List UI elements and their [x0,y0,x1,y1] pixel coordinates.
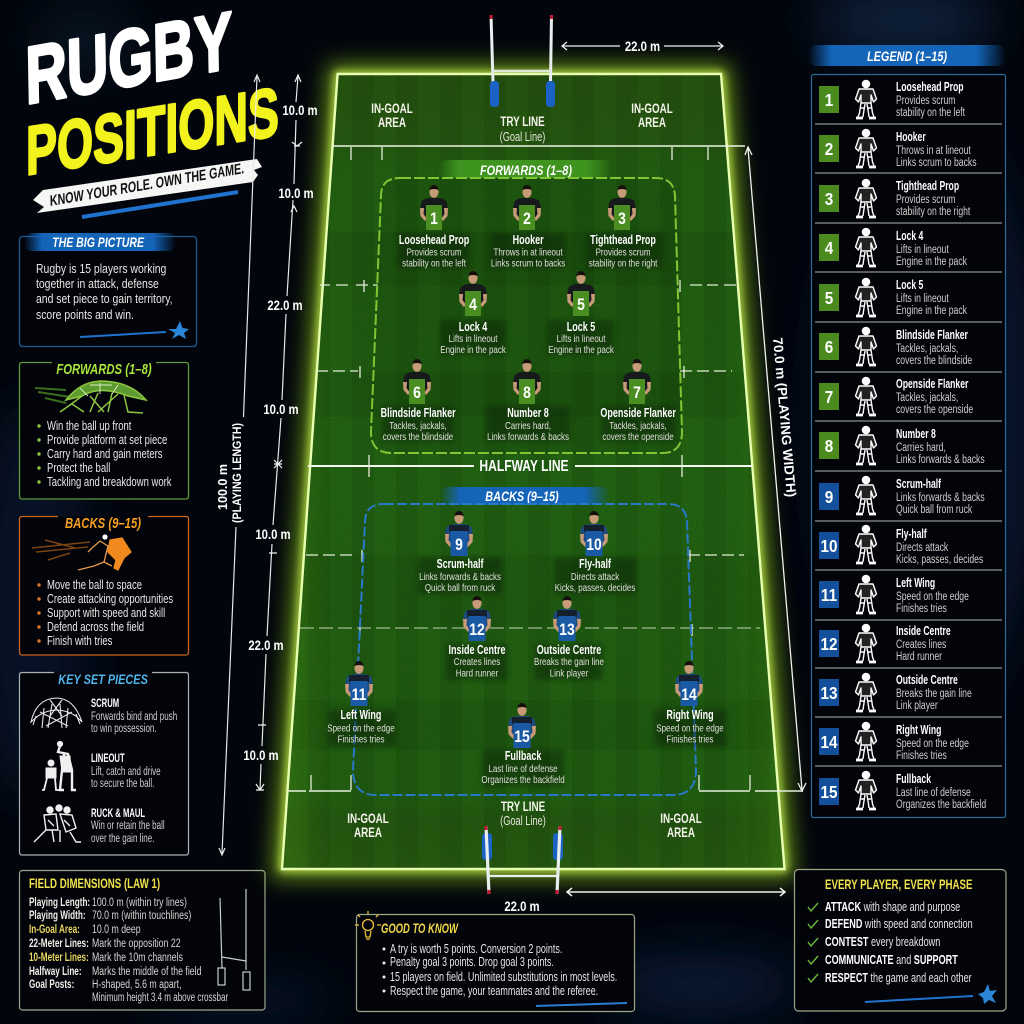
zone label: top left in-goal: AREA [378,114,406,130]
field: grass [270,70,800,875]
legend row 5: 5 [825,288,833,308]
legend row 1 [819,80,965,119]
player 13 [534,596,604,680]
player 15: 15 [514,728,530,746]
bullet list: Protect the ball [47,462,110,475]
lines: dashed field markings [300,147,760,790]
player 15 [481,703,565,786]
player 7: Openside Flanker [600,407,676,420]
dimension: playing length outer arrow: (PLAYING LENGTH) [230,423,244,523]
banner: the big picture [24,233,176,251]
player 13: Link player [550,667,588,679]
player 2: Hooker [513,234,544,247]
bullet list: Create attacking opportunities [47,593,174,606]
legend row 13 [819,673,972,712]
legend row 2: 2 [825,139,833,159]
legend row 10: Kicks, passes, decides [896,554,983,566]
bullet list: Provide platform at set piece [47,434,167,447]
ruck text: over the gain line. [91,833,154,846]
player 9: Quick ball from ruck [425,582,496,593]
player 1: Provides scrum [407,246,462,258]
scrum text: to win possession. [91,723,157,736]
dimension: inner side segments: 10.0 m [243,748,279,763]
legend row 7 [819,377,973,416]
heading: THE BIG PICTURE [52,235,145,250]
legend row 14: 14 [821,732,838,752]
player 12 [446,596,508,680]
player 3: stability on the right [589,257,658,269]
checklist: DEFEND with speed and connection [825,918,973,931]
dimension: top width arrow [562,39,723,54]
icon: light bulb [355,911,381,939]
legend row 3: Provides scrum [896,194,955,206]
legend row 9: Links forwards & backs [896,492,985,504]
panel: key set pieces [20,672,188,855]
tagline banner [33,159,262,217]
legend row 13: Outside Centre [896,673,958,688]
legend row 4: Lifts in lineout [896,244,949,256]
legend row 10: 10 [820,536,838,556]
dimension: inner side segments: 10.0 m [263,402,299,417]
checklist: ATTACK with shape and purpose [825,901,960,914]
player 7 [600,359,676,442]
zone label: top try line: (Goal Line) [500,131,545,144]
lineout text: LINEOUT [91,752,125,766]
legend row 14: Speed on the edge [896,738,969,750]
body text: together in attack, defense [36,278,159,291]
legend row 9: 9 [825,487,833,507]
bullet list [37,579,174,648]
dimension: inner side segments: 22.0 m [267,298,303,313]
legend row 8: Carries hard, [896,442,946,454]
zone label: bottom left in-goal: IN-GOAL [347,810,389,826]
player 6 [381,359,456,442]
banner: forwards [438,160,612,178]
legend row 6: Tackles, jackals, [896,343,958,355]
zone label: top right in-goal: AREA [638,114,666,130]
legend row 14 [819,722,969,762]
legend row 2: Throws in at lineout [896,145,971,157]
player 2: Links scrum to backs [491,257,566,269]
player 6: Tackles, jackals, [389,420,447,431]
scrum text: SCRUM [91,697,119,711]
decorative stroke [536,1003,627,1006]
dashed zone: backs [353,504,696,795]
heading: FIELD DIMENSIONS (LAW 1) [29,877,160,891]
scrum text: Forwards bind and push [91,711,177,724]
ruck text: Win or retain the ball [91,820,165,833]
player 3: 3 [618,210,626,228]
bullet list: Finish with tries [47,635,113,648]
legend row 2: Links scrum to backs [896,157,977,169]
dimension: playing length outer arrow: 100.0 m [215,464,230,510]
dimension: playing width side arrow: 70.0 m (PLAYING WIDTH) [770,337,799,498]
decorative star stroke [865,984,997,1004]
player 4: 4 [469,296,477,314]
dimension: inner side segments: 22.0 m [248,638,284,653]
player 3: Provides scrum [596,246,651,258]
line: bottom try line [288,790,803,792]
player 6: covers the blindside [383,431,453,442]
player 14: 14 [681,686,697,704]
legend row 7: Tackles, jackals, [896,392,958,404]
legend row 5: Lifts in lineout [896,293,949,305]
legend row 9: Quick ball from ruck [896,504,973,516]
dimensions table: 100.0 m (within try lines) [92,896,187,909]
legend row 8 [819,426,985,466]
zone label: bottom right in-goal: AREA [667,824,695,840]
decorative star stroke [80,321,189,339]
legend row 11: Left Wing [896,576,935,591]
icon: lineout [42,741,76,790]
player 5: Lock 5 [567,321,595,334]
legend row 10 [819,525,983,566]
legend row 8: Number 8 [896,427,936,442]
player 14: Right Wing [666,709,714,722]
player 14 [654,661,726,746]
bullet list: Defend across the field [47,621,144,634]
legend row 3: 3 [825,189,833,209]
player 11: Left Wing [341,709,381,722]
icon: scrum [31,698,82,728]
panel: good to know [355,911,634,1012]
legend row 4: 4 [825,238,834,258]
legend row 13: 13 [820,683,838,703]
heading: GOOD TO KNOW [381,921,459,936]
forwards group [371,160,682,453]
legend row 14: Right Wing [896,723,941,738]
player 11 [327,661,396,746]
dashed zone: forwards [371,178,682,453]
player 11: Speed on the edge [327,722,395,734]
player 9: 9 [455,536,463,554]
legend row 5: Lock 5 [896,278,923,293]
legend row 7: Openside Flanker [896,377,969,392]
legend row 6: Blindside Flanker [896,328,968,343]
legend row 11: Speed on the edge [896,591,969,603]
player 7: 7 [633,384,641,402]
ruck text [91,807,165,846]
legend row 9 [819,476,985,516]
player 15: Organizes the backfield [481,774,565,785]
legend row 12: Creates lines [896,639,946,651]
zone label: top try line [500,113,545,144]
legend row 4: Engine in the pack [896,256,968,268]
field glow [282,74,784,869]
legend row 15 [819,771,986,811]
player 8: 8 [523,384,531,402]
scrum text [91,697,177,736]
dimensions table: Mark the 10m channels [92,951,183,964]
legend row 15: Organizes the backfield [896,799,986,811]
heading: EVERY PLAYER, EVERY PHASE [825,878,973,892]
legend row 10: Fly-half [896,527,927,542]
legend row 1: Provides scrum [896,95,955,107]
legend row 9: Scrum-half [896,477,941,492]
legend row 3: stability on the right [896,206,970,218]
dimension: inner side segments: 10.0 m [255,527,291,542]
player 13: 13 [559,621,575,639]
label: halfway line: HALFWAY LINE [479,457,569,474]
player 10: Fly-half [579,558,611,571]
player 9: Links forwards & backs [419,571,501,582]
bullet list: Penalty goal 3 points. Drop goal 3 points. [390,956,554,969]
player 2: Throws in at lineout [494,246,563,258]
dimension: inner side segments: 10.0 m [278,186,314,201]
dimension: top width arrow: 22.0 m [625,39,660,54]
legend row 11: 11 [821,585,837,605]
legend row 11 [819,575,969,615]
player 3: Tighthead Prop [590,234,656,247]
zone label: top try line: TRY LINE [500,113,545,129]
ruck text: RUCK & MAUL [91,807,145,821]
bullet list: Carry hard and gain meters [47,448,163,461]
bullet list: Move the ball to space [47,579,142,592]
checklist: CONTEST every breakdown [825,936,940,949]
icon: running back [32,534,131,570]
player 15: Last line of defense [488,763,558,774]
player 1: stability on the left [402,257,466,269]
legend row 1: stability on the left [896,107,965,119]
legend row 15: 15 [820,782,838,802]
player 11: Finishes tries [338,733,385,745]
bullet list: Support with speed and skill [47,607,165,620]
legend row 5: Engine in the pack [896,305,968,317]
player 10: Kicks, passes, decides [555,582,636,593]
legend row 15: Fullback [896,772,932,787]
checklist [808,901,973,985]
legend row 3 [819,179,970,218]
goal posts: top [490,15,555,107]
separators [815,124,1002,766]
legend row 13: Link player [896,700,938,712]
lineout text [91,752,161,791]
player 4: Lifts in lineout [449,333,498,344]
legend row 2: Hooker [896,130,926,145]
heading: BACKS (9–15) [65,515,141,531]
panel: field dimensions [20,870,265,1010]
player 13: Outside Centre [537,644,601,657]
checklist: RESPECT the game and each other [825,972,972,985]
player 12: 12 [469,621,485,639]
dimensions table: Marks the middle of the field [92,965,202,978]
checklist: COMMUNICATE and SUPPORT [825,954,958,967]
bullet list [37,420,172,489]
field: rugby pitch [270,70,803,875]
player 8: Number 8 [507,407,549,420]
bullet list [382,943,617,998]
player 2: 2 [523,210,531,228]
player 8: Carries hard, [505,420,551,431]
legend row 6 [819,327,972,367]
dimension: inner side segments [243,75,318,790]
bullet list: 15 players on field. Unlimited substitutions in most levels. [390,971,617,984]
player 11: 11 [352,686,367,704]
legend row 12: Inside Centre [896,624,951,639]
dimensions table: In-Goal Area: [29,924,80,937]
player 12: Inside Centre [449,644,505,657]
legend row 8: 8 [825,436,833,456]
dimension: bottom width arrow: 22.0 m [504,899,540,914]
line: halfway [308,465,752,467]
player 6: 6 [413,384,421,402]
zone label: bottom right in-goal: IN-GOAL [660,810,702,826]
player 7: covers the openside [602,431,674,442]
panel: the big picture [20,233,196,346]
dimensions table: 22-Meter Lines: [29,938,89,951]
player 5: Lifts in lineout [557,333,606,344]
title: POSITIONS: POSITIONS [26,74,279,190]
player 8: Links forwards & backs [487,431,569,442]
dimension: bottom width arrow [504,888,785,914]
player 8 [486,359,570,442]
player 14: Finishes tries [667,733,714,745]
legend row 12: 12 [820,634,838,654]
zone label: bottom try line: TRY LINE [501,798,545,814]
dimensions table: 70.0 m (within touchlines) [92,909,191,922]
player 4: Lock 4 [459,321,487,334]
player 1: 1 [430,210,438,228]
legend row 12 [819,624,951,663]
legend row 7: covers the openside [896,404,973,416]
banner heading: FORWARDS (1–8) [480,163,572,178]
dimension: playing length outer arrow [215,75,260,855]
player 9 [418,511,502,594]
legend row 3: Tighthead Prop [896,179,959,194]
player 4 [440,271,506,355]
legend row 12: Hard runner [896,651,942,663]
heading: FORWARDS (1–8) [56,361,152,377]
player 5 [548,271,614,355]
dimensions table: Halfway Line: [29,966,82,979]
backs group [327,487,726,795]
dimensions table: Playing Length: [29,897,90,910]
zone label: top right in-goal: IN-GOAL [631,100,673,116]
line: top try line [332,145,745,147]
panel: forwards [20,361,188,499]
bullet list: Win the ball up front [47,420,131,433]
bullet list: A try is worth 5 points. Conversion 2 points. [390,943,562,956]
legend row 15: Last line of defense [896,787,971,799]
zone label: top left in-goal: IN-GOAL [371,100,413,116]
dimensions table: 10.0 m deep [92,923,141,936]
player 12: Creates lines [454,656,501,667]
dimensions table: H-shaped, 5.6 m apart, [92,978,182,991]
dimension: inner side segments: 10.0 m [282,103,318,118]
panel: every player every phase [794,870,1006,1011]
tagline text: KNOW YOUR ROLE. OWN THE GAME. [50,160,244,210]
legend row 14: Finishes tries [896,750,947,762]
zone label: bottom left in-goal: AREA [354,824,382,840]
zone label: bottom try line: (Goal Line) [500,815,546,828]
player 10: 10 [586,536,602,554]
legend row 4 [819,228,968,268]
player 6: Blindside Flanker [381,407,456,420]
dimensions table: Mark the opposition 22 [92,937,181,950]
legend row 11: Finishes tries [896,603,947,615]
body text: score points and win. [36,309,134,322]
goal posts: bottom [482,826,563,894]
player 13: Breaks the gain line [534,656,604,667]
body text: Rugby is 15 players working [36,263,166,276]
bullet list: Respect the game, your teammates and the referee. [390,985,598,998]
legend row 6: covers the blindside [896,355,972,367]
player 10 [554,511,636,594]
player 15: Fullback [505,750,542,763]
player 5: Engine in the pack [548,344,614,355]
legend row 8: Links forwards & backs [896,454,985,466]
legend row 4: Lock 4 [896,229,924,244]
icon: goal posts [218,889,250,990]
player 14: Speed on the edge [656,722,724,734]
title [25,0,279,190]
legend row 10: Directs attack [896,542,949,554]
banner heading: BACKS (9–15) [485,489,559,504]
icon: scrum silhouette [35,381,146,413]
player 5: 5 [577,296,585,314]
legend row 1: 1 [825,90,833,110]
legend row 13: Breaks the gain line [896,688,972,700]
body text: and set piece to gain territory, [36,293,173,306]
dimension: playing width side arrow [745,147,806,791]
zone label: bottom try line [500,798,546,828]
legend banner [808,45,1006,66]
player 2 [490,185,566,269]
legend row 5 [819,278,968,317]
player 1: Loosehead Prop [399,234,470,247]
lineout text: Lift, catch and drive [91,766,161,779]
dimensions table: Minimum height 3.4 m above crossbar [92,992,229,1005]
dimensions table: 10-Meter Lines: [29,952,89,965]
player 1 [398,185,470,269]
player 3 [586,185,662,269]
panel: backs [20,515,188,655]
legend heading: LEGEND (1–15) [867,49,947,64]
legend row 7: 7 [825,387,833,407]
heading: KEY SET PIECES [58,672,148,687]
panel: legend [812,74,1006,818]
dimensions table: Playing Width: [29,910,86,923]
bullet list: Tackling and breakdown work [47,476,172,489]
icon: ruck and maul [34,805,81,842]
legend row 6: 6 [825,337,833,357]
banner: backs [440,487,610,505]
dimensions table [29,896,229,1005]
legend row 2 [819,129,977,169]
player 9: Scrum-half [437,558,484,571]
player 10: Directs attack [571,571,619,582]
player 4: Engine in the pack [440,344,506,355]
player 12: Hard runner [456,667,498,679]
body text [36,263,173,322]
field: outline [282,74,784,869]
dimensions table: Goal Posts: [29,979,74,992]
legend row 1: Loosehead Prop [896,80,964,95]
player 7: Tackles, jackals, [609,420,667,431]
lineout text: to secure the ball. [91,778,154,791]
